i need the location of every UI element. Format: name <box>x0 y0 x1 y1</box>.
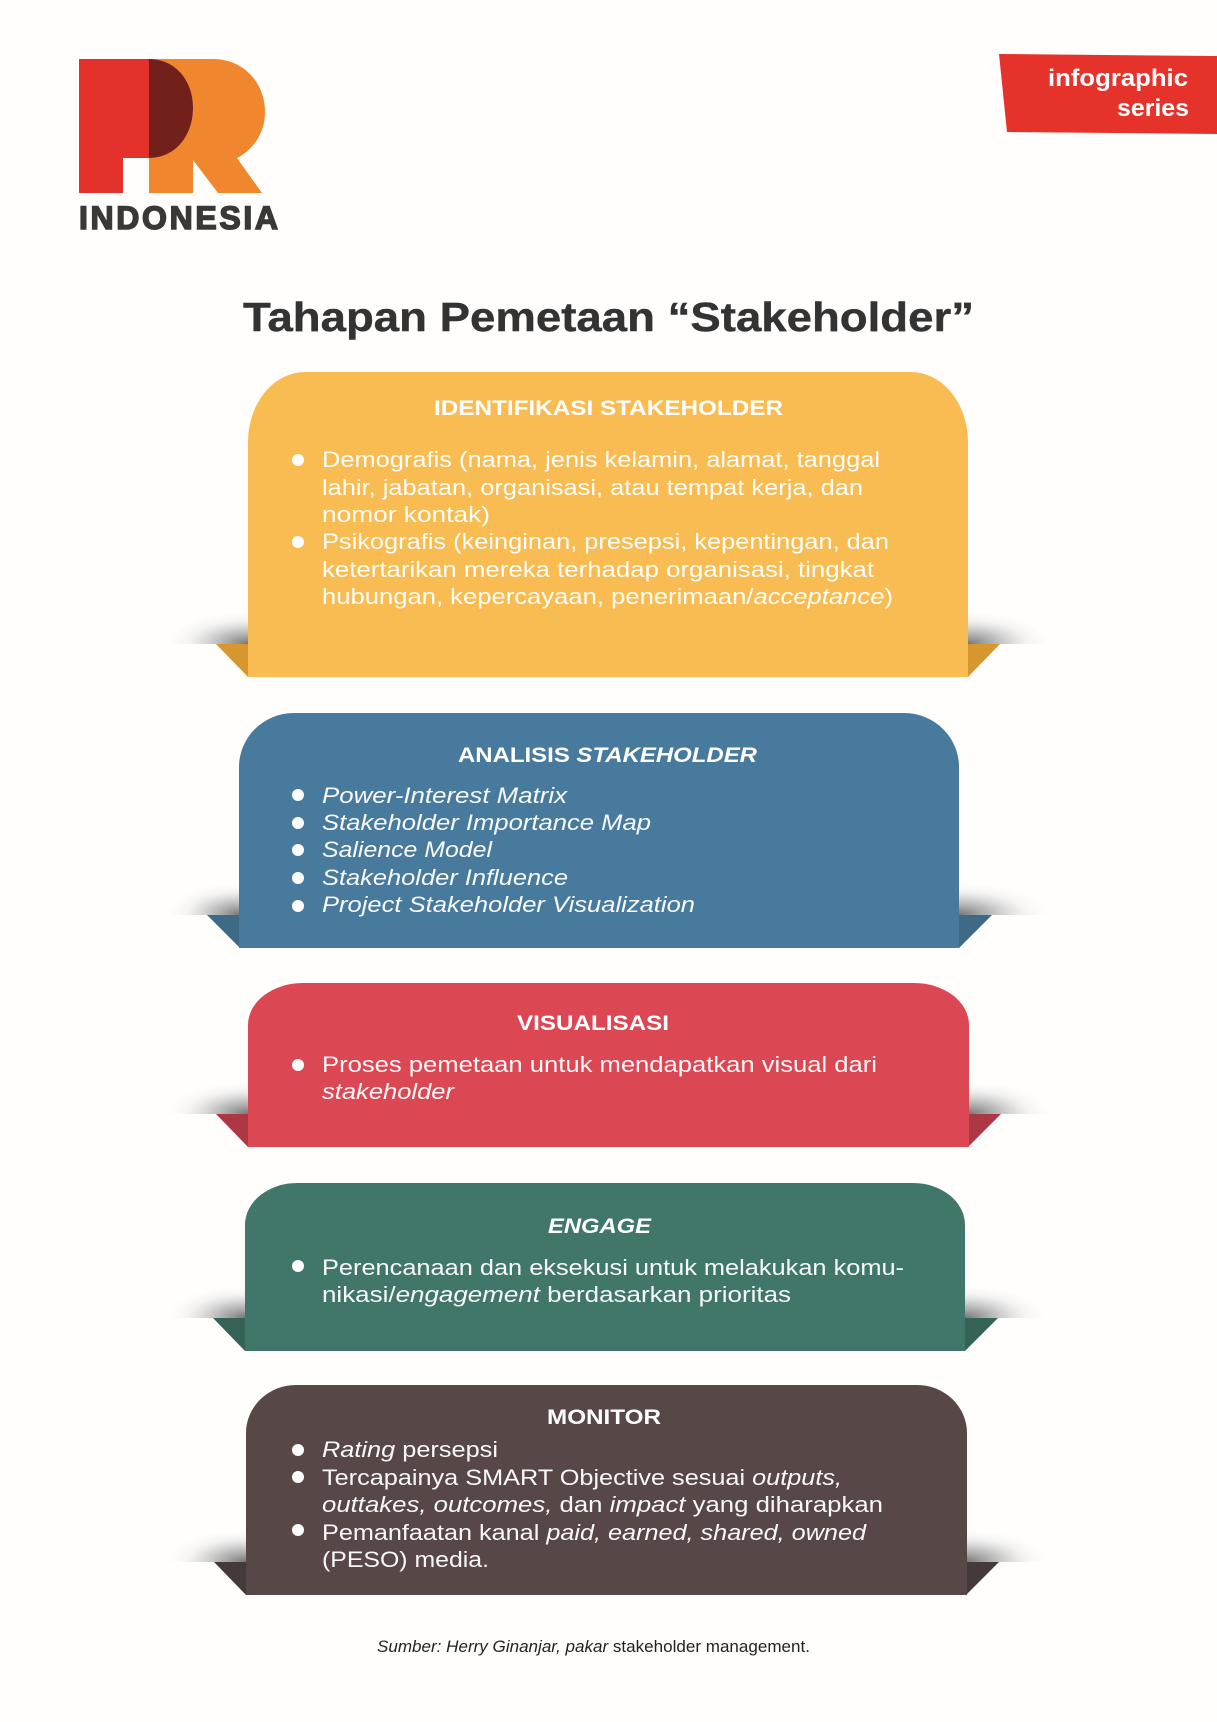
panel: monitor: MONITOR <box>547 1406 661 1429</box>
panel: identifikasi stakeholder: hubungan, kepercayaan, penerimaan/ acceptance ) <box>322 584 893 609</box>
panel: analisis stakeholder <box>168 713 1047 948</box>
panel: identifikasi stakeholder: Psikografis (keinginan, presepsi, kepentingan, dan <box>322 529 889 554</box>
panel: visualisasi <box>168 983 1049 1147</box>
panel: visualisasi: Proses pemetaan untuk mendapatkan visual dari <box>322 1052 877 1077</box>
panel: analisis stakeholder: ANALISIS STAKEHOLDER <box>458 744 758 767</box>
panel: analisis stakeholder: Power-Interest Matrix <box>322 783 568 808</box>
badge: infographic series <box>999 54 1217 134</box>
panel: monitor: (PESO) media. <box>322 1547 489 1572</box>
badge: infographic series: infographic <box>1048 65 1188 92</box>
panel: engage: nikasi/ engagement berdasarkan prioritas <box>322 1282 791 1307</box>
panel: identifikasi stakeholder: nomor kontak) <box>322 502 490 527</box>
panel: identifikasi stakeholder: ketertarikan mereka terhadap organisasi, tingkat <box>322 557 874 582</box>
panel: identifikasi stakeholder: IDENTIFIKASI STAKEHOLDER <box>434 397 783 420</box>
panel: identifikasi stakeholder <box>168 372 1048 677</box>
panel: analisis stakeholder: Stakeholder Influence <box>322 865 568 890</box>
panel: monitor: Rating persepsi <box>322 1437 498 1462</box>
panel: monitor: outtakes, outcomes, dan impact yang diharapkan <box>322 1492 883 1517</box>
panel: visualisasi: VISUALISASI <box>517 1012 669 1035</box>
panel: identifikasi stakeholder: Demografis (nama, jenis kelamin, alamat, tanggal <box>322 447 880 472</box>
panel: monitor: Pemanfaatan kanal paid, earned, shared, owned <box>322 1520 867 1545</box>
badge: infographic series: series <box>1117 95 1189 122</box>
logo: PR Indonesia: INDONESIA <box>79 200 278 236</box>
panel: monitor <box>168 1385 1046 1595</box>
panel: identifikasi stakeholder: lahir, jabatan, organisasi, atau tempat kerja, dan <box>322 475 863 500</box>
source note: Sumber: Herry Ginanjar, pakar stakeholder management. <box>377 1637 810 1656</box>
panel: analisis stakeholder: Project Stakeholder Visualization <box>322 892 695 917</box>
logo: PR Indonesia <box>79 59 278 236</box>
panel: analisis stakeholder: Stakeholder Importance Map <box>322 810 651 835</box>
panel: monitor: Tercapainya SMART Objective sesuai outputs, <box>322 1465 842 1490</box>
panel: engage: Perencanaan dan eksekusi untuk melakukan komu- <box>322 1255 904 1280</box>
panel: visualisasi: stakeholder <box>322 1079 456 1104</box>
title: Tahapan Pemetaan “Stakeholder” <box>243 294 974 340</box>
panel: engage <box>168 1183 1045 1351</box>
panel: engage: ENGAGE <box>548 1215 652 1238</box>
panel: analisis stakeholder: Salience Model <box>322 837 493 862</box>
